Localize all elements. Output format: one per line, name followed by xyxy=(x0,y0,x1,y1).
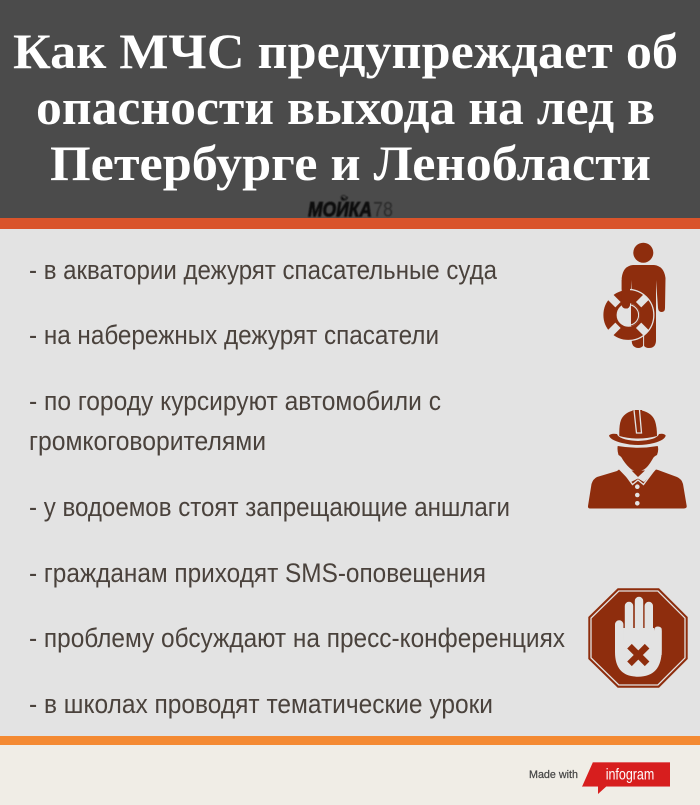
icon: stop hand sign xyxy=(588,588,688,688)
title xyxy=(13,23,678,191)
list of measures: громкоговорителями xyxy=(29,426,266,456)
logo: infogram xyxy=(582,762,670,794)
panel: header background xyxy=(0,0,700,218)
logo: Мойка78: 78 xyxy=(373,198,393,222)
header accent bar xyxy=(0,218,700,229)
list of measures: - в акватории дежурят спасательные суда xyxy=(29,255,498,285)
title: опасности выхода на лед в xyxy=(36,79,655,135)
x mark xyxy=(630,646,647,664)
list of measures: - по городу курсируют автомобили с xyxy=(29,386,441,416)
list of measures: - гражданам приходят SMS-оповещения xyxy=(29,558,486,588)
list of measures: - в школах проводят тематические уроки xyxy=(29,689,493,719)
icon: lifeguard with lifebuoy xyxy=(603,243,666,348)
icon: rescuer in helmet xyxy=(588,410,687,508)
title: Как МЧС предупреждает об xyxy=(13,23,678,79)
logo: infogram: infogram xyxy=(606,766,654,784)
list of measures: - проблему обсуждают на пресс-конференциях xyxy=(29,623,565,653)
list of measures: - на набережных дежурят спасатели xyxy=(29,320,439,350)
torso seen through the ring xyxy=(622,304,640,326)
footer accent bar xyxy=(0,736,700,745)
made with label: Made with xyxy=(529,769,578,781)
title: Петербурге и Ленобласти xyxy=(50,135,651,191)
logo: Мойка78: МОЙКА xyxy=(308,198,372,222)
list of measures: - у водоемов стоят запрещающие аншлаги xyxy=(29,492,510,522)
hand xyxy=(615,601,662,677)
list of measures xyxy=(29,255,565,719)
panel: body background xyxy=(0,229,700,736)
panel: footer background xyxy=(0,745,700,805)
